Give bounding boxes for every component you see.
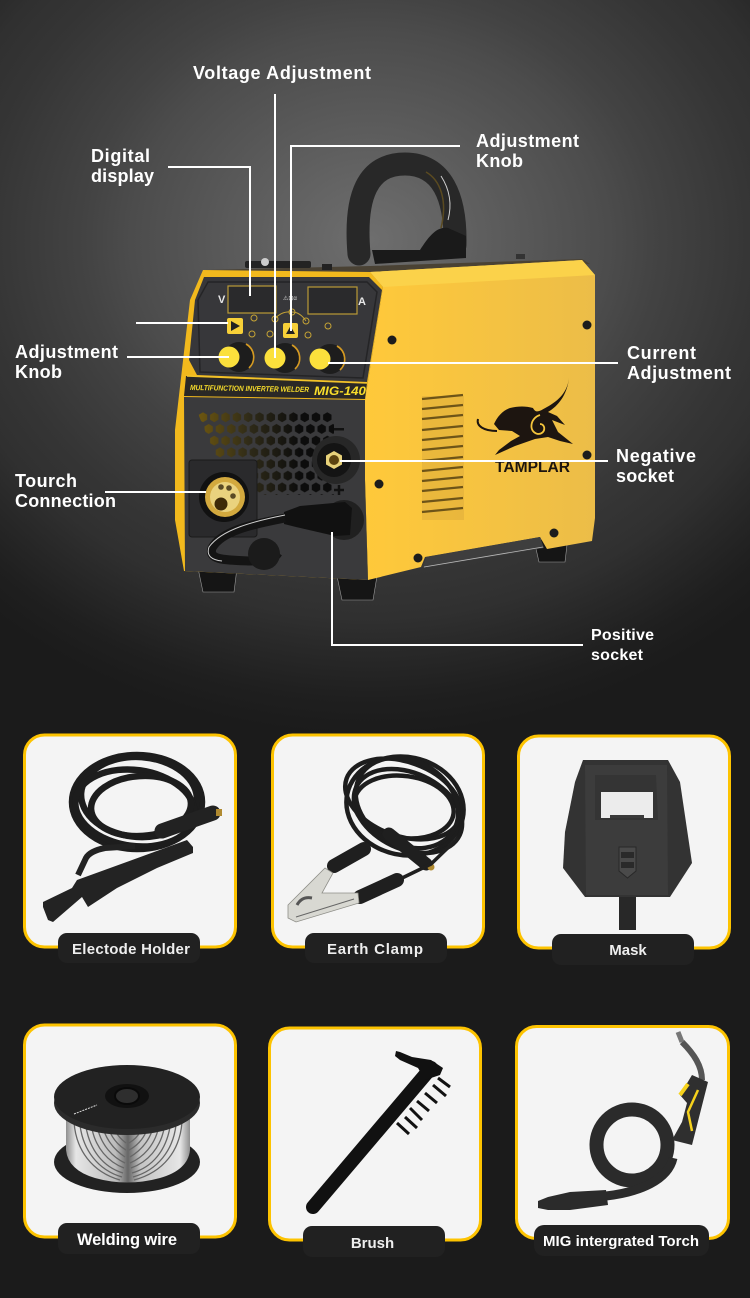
front bezel	[175, 270, 383, 580]
label pill: electrode holder	[58, 933, 200, 963]
label: negative socket	[340, 446, 696, 486]
panel: MIG torch	[516, 1026, 728, 1256]
label pill: earth clamp	[305, 933, 447, 963]
label: torch connection: Connection	[15, 491, 116, 511]
label: voltage adjustment: Voltage Adjustment	[193, 63, 371, 83]
label pill: mask: Mask	[609, 942, 647, 959]
control panel	[189, 277, 382, 382]
icon: welding mask	[563, 760, 692, 930]
current display	[308, 287, 357, 314]
label pill: brush: Brush	[351, 1235, 394, 1252]
voltage display	[228, 286, 276, 313]
icon: brush	[313, 1051, 450, 1207]
model band: MULTIFUNCTION INVERTER WELDER	[190, 383, 310, 394]
torch connection socket	[189, 460, 257, 537]
hexagonal vent grille	[198, 412, 334, 495]
model band	[184, 376, 367, 399]
brand logo: TAMPLAR	[495, 459, 570, 476]
label: left adjustment knob	[15, 342, 229, 382]
panel letters	[218, 294, 366, 308]
label pill: electrode holder: Electode Holder	[72, 941, 190, 958]
indicator LEDs	[249, 309, 331, 338]
side vent slats	[422, 395, 464, 520]
yellow side panel	[365, 260, 595, 580]
label pill: MIG torch	[534, 1225, 709, 1256]
panel: earth clamp	[272, 735, 484, 963]
side screws	[374, 320, 592, 562]
icon: electrode holder	[43, 753, 222, 922]
label: positive socket	[332, 532, 654, 664]
label: negative socket: Negative	[616, 446, 696, 466]
label pill: welding wire	[58, 1223, 200, 1254]
label: current adjustment: Current	[627, 343, 696, 363]
right knob	[310, 344, 345, 374]
label pill: MIG torch: MIG intergrated Torch	[543, 1233, 699, 1250]
label: top adjustment knob	[291, 131, 579, 331]
pointer: mode button	[136, 322, 228, 324]
model band: MIG-140	[314, 386, 367, 398]
icon: wire spool	[54, 1065, 200, 1193]
center knob	[264, 343, 300, 373]
label pill: earth clamp: Earth Clamp	[327, 941, 423, 958]
panel: electrode holder	[24, 735, 236, 963]
label pill: brush	[303, 1226, 445, 1257]
label: torch connection: Tourch	[15, 471, 77, 491]
panel letters: V	[218, 294, 226, 306]
panel: mask	[518, 736, 730, 965]
handle	[358, 164, 466, 264]
label pill: mask	[552, 934, 694, 965]
label: current adjustment	[328, 343, 731, 383]
label: top adjustment knob: Adjustment	[476, 131, 579, 151]
label: positive socket: Positive	[591, 627, 654, 644]
label: negative socket: socket	[616, 466, 674, 486]
positive sign	[334, 485, 344, 495]
label: left adjustment knob: Knob	[15, 362, 62, 382]
positive plug and cable	[208, 500, 364, 570]
label: top adjustment knob: Knob	[476, 151, 523, 171]
icon: earth clamp	[288, 740, 476, 922]
negative socket	[312, 428, 360, 484]
mode buttons	[227, 318, 298, 338]
label: digital display	[91, 146, 250, 296]
panel letters: ⚠⊡α	[283, 295, 297, 302]
left knob	[218, 342, 254, 372]
label: torch connection	[15, 471, 206, 511]
welder machine	[175, 164, 595, 600]
label: digital display: Digital	[91, 146, 150, 166]
label pill: welding wire: Welding wire	[77, 1231, 177, 1249]
label: current adjustment: Adjustment	[627, 363, 731, 383]
icon: MIG torch	[538, 1032, 708, 1210]
label: positive socket: socket	[591, 647, 644, 664]
label: left adjustment knob: Adjustment	[15, 342, 118, 362]
top surface and latch	[205, 254, 590, 275]
feet	[198, 536, 568, 600]
label: digital display: display	[91, 166, 154, 186]
lower front panel	[184, 397, 368, 580]
panel: welding wire	[24, 1025, 236, 1254]
panel letters: A	[358, 296, 366, 308]
brand logo	[478, 377, 573, 476]
panel: brush	[270, 1028, 480, 1257]
